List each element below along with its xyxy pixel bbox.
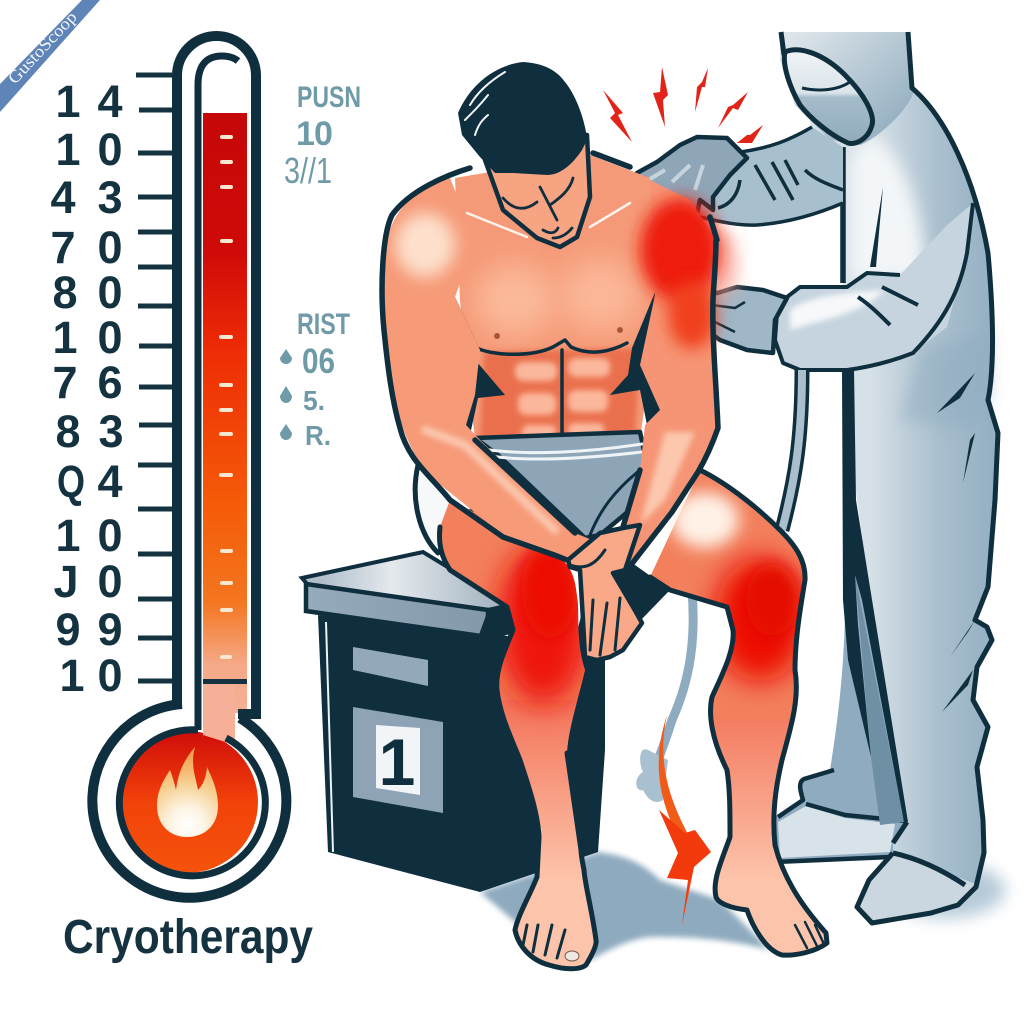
lower suit blue panel bbox=[900, 330, 990, 430]
sleeve outline bbox=[700, 127, 843, 225]
scale ticks bbox=[136, 75, 172, 681]
number plate bbox=[353, 707, 443, 813]
side labels upper: 10 bbox=[296, 115, 333, 153]
hose core bbox=[782, 370, 802, 530]
inner leg dark seam bbox=[842, 370, 908, 822]
flame icon bbox=[157, 747, 218, 837]
bulb fill bbox=[116, 731, 258, 873]
tick scale numbers: 0 bbox=[97, 650, 123, 701]
label: Cryotherapy: Cryotherapy bbox=[63, 911, 313, 964]
arm outlines bbox=[382, 153, 718, 570]
hip backing bbox=[415, 465, 480, 553]
tick scale numbers: 7 bbox=[52, 357, 78, 408]
vapor puff bbox=[636, 749, 668, 802]
leg outline bbox=[439, 527, 596, 969]
level bar bbox=[203, 679, 247, 684]
shank light tone bbox=[714, 723, 824, 953]
mercury column bbox=[203, 113, 247, 745]
tick scale numbers: 6 bbox=[97, 357, 123, 408]
viewer-right leg bbox=[650, 470, 830, 980]
nipples bbox=[494, 333, 500, 339]
glove finger highlights bbox=[645, 165, 703, 190]
right side seams bbox=[870, 187, 975, 712]
tick scale numbers: 1 bbox=[55, 76, 81, 127]
tick scale numbers: 4 bbox=[97, 76, 123, 127]
side labels lower: 06 bbox=[302, 342, 335, 381]
drop bullets bbox=[280, 349, 292, 440]
tick scale numbers: 4 bbox=[97, 456, 123, 507]
plate number backing bbox=[376, 725, 420, 795]
tick scale numbers: 1 bbox=[52, 312, 78, 363]
briefs waistband bbox=[482, 444, 642, 459]
head bbox=[458, 62, 590, 247]
shank light tone bbox=[502, 700, 594, 966]
body seam bbox=[840, 147, 846, 283]
shoulder inflammation bbox=[640, 198, 720, 302]
viewer-left leg bbox=[439, 500, 600, 980]
tick scale numbers: 0 bbox=[97, 510, 123, 561]
medic in protective suit bbox=[627, 32, 998, 923]
tick scale numbers: 0 bbox=[97, 556, 123, 607]
tick scale numbers: 8 bbox=[52, 267, 78, 318]
thermometer bbox=[92, 36, 286, 898]
hood bbox=[780, 32, 914, 145]
viewer-right arm bbox=[600, 180, 718, 575]
drawer handle bbox=[353, 647, 428, 686]
upper glove bbox=[627, 137, 747, 227]
sleeve highlight bbox=[790, 290, 885, 330]
side labels lower: RIST bbox=[297, 308, 350, 341]
toes bbox=[795, 922, 823, 948]
forward sleeve outline bbox=[775, 203, 973, 370]
dark under-thigh bbox=[570, 540, 670, 700]
reaching sleeve bbox=[680, 127, 843, 225]
shoe outline bbox=[775, 770, 905, 862]
torso bbox=[455, 155, 660, 440]
tick scale numbers: 0 bbox=[97, 222, 123, 273]
side labels upper: PUSN bbox=[297, 81, 361, 114]
briefs bbox=[475, 432, 647, 538]
lower glove bbox=[693, 287, 787, 353]
forearm highlight bbox=[425, 430, 555, 530]
box side highlight bbox=[326, 622, 333, 852]
tick scale numbers: Q bbox=[57, 456, 85, 507]
tick scale numbers: 4 bbox=[50, 172, 76, 223]
hand on knee bbox=[568, 525, 642, 660]
lid front bbox=[306, 584, 488, 637]
toes bbox=[523, 925, 565, 958]
watermark ribbon bbox=[0, 0, 100, 112]
mask line bbox=[802, 82, 850, 90]
tick scale numbers: 1 bbox=[59, 650, 85, 701]
side labels upper: 3//1 bbox=[284, 150, 332, 191]
tick scale numbers: 0 bbox=[97, 124, 123, 175]
side labels upper bbox=[284, 81, 361, 191]
face bbox=[485, 130, 590, 247]
box body bbox=[318, 615, 605, 892]
tick scale numbers: 1 bbox=[55, 124, 81, 175]
shoe highlight bbox=[778, 806, 895, 858]
chest highlight right bbox=[560, 259, 640, 331]
side labels lower bbox=[280, 308, 350, 451]
hose bbox=[782, 370, 802, 530]
seated man bbox=[382, 62, 830, 980]
nipple right bbox=[617, 327, 623, 333]
abs muscles bbox=[515, 358, 610, 440]
tick scale numbers: 8 bbox=[55, 406, 81, 457]
lid top bbox=[302, 552, 510, 610]
deltoid highlight bbox=[395, 213, 455, 277]
main suit body bbox=[780, 32, 998, 923]
knee inflammation bbox=[714, 558, 806, 682]
leg outline bbox=[650, 470, 827, 955]
right forearm highlight bbox=[640, 432, 695, 525]
tick scale numbers: 0 bbox=[97, 312, 123, 363]
floor shadow bbox=[480, 852, 1005, 960]
eyes and nose bbox=[503, 178, 573, 238]
tick scale numbers: 9 bbox=[97, 604, 123, 655]
left trouser leg bbox=[775, 540, 915, 863]
outer glass outline bbox=[92, 36, 286, 898]
tick scale numbers: 3 bbox=[98, 406, 124, 457]
viewer-left arm bbox=[383, 178, 592, 560]
briefs fold bbox=[590, 470, 640, 535]
tick scale numbers: 0 bbox=[97, 267, 123, 318]
hair bbox=[458, 62, 587, 175]
white neck crease bbox=[467, 203, 630, 237]
tick scale numbers: 9 bbox=[55, 604, 81, 655]
white highlight on chest bbox=[850, 135, 925, 280]
forward sleeve bbox=[775, 203, 973, 370]
tick scale numbers: J bbox=[53, 556, 79, 607]
pain lightning bolts bbox=[603, 67, 763, 143]
lower hose and vapor bbox=[636, 590, 711, 925]
glove crease bbox=[712, 302, 745, 332]
chest lines bbox=[477, 340, 627, 435]
plate number: 1 bbox=[379, 725, 415, 799]
inner glass outline bbox=[119, 56, 265, 876]
watermark ribbon: GustoScoop bbox=[4, 7, 81, 88]
side labels lower: R. bbox=[305, 420, 331, 451]
thigh highlight bbox=[671, 492, 739, 548]
chest highlight bbox=[475, 264, 555, 336]
knee inflammation bbox=[497, 545, 589, 705]
neck overlay bbox=[203, 684, 235, 745]
shoulder halo bbox=[710, 230, 738, 300]
arm upper red blend bbox=[668, 281, 716, 349]
hair highlights bbox=[465, 72, 505, 135]
storage box bbox=[302, 552, 605, 892]
foot of right leg bbox=[857, 852, 978, 923]
fingers bbox=[570, 550, 620, 655]
dark rib wedges bbox=[455, 285, 670, 440]
shin highlight bbox=[540, 827, 542, 831]
side labels lower: 5. bbox=[303, 385, 325, 416]
abs base bbox=[480, 348, 640, 440]
tick scale numbers bbox=[50, 76, 124, 701]
suit outlines bbox=[781, 32, 998, 923]
pain bolt bbox=[659, 810, 711, 925]
orange trail bbox=[659, 715, 697, 850]
inner wedge bbox=[855, 575, 904, 825]
level marks bbox=[221, 137, 231, 657]
lid side bbox=[477, 605, 512, 640]
tick scale numbers: 3 bbox=[97, 172, 123, 223]
tick scale numbers: 7 bbox=[50, 222, 76, 273]
big toe nail bbox=[565, 951, 579, 961]
face shield bbox=[784, 50, 873, 143]
tick scale numbers: 1 bbox=[55, 510, 81, 561]
